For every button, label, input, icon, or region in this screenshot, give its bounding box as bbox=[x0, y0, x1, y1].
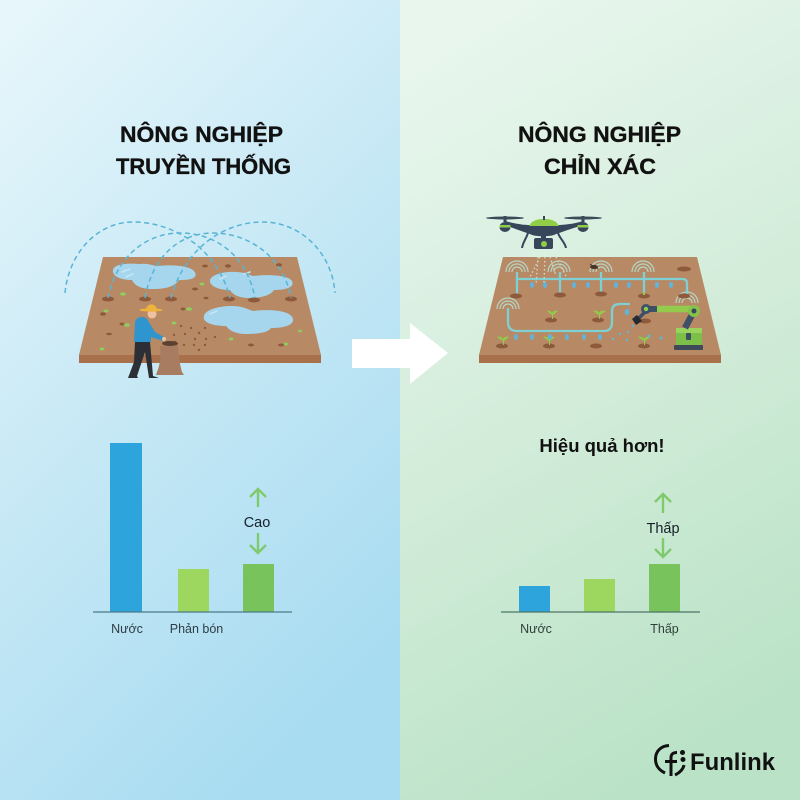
seedlings bbox=[497, 292, 650, 345]
illustration: traditional field bbox=[65, 222, 335, 378]
logo wordmark: Funlink bbox=[690, 749, 776, 776]
arrow: up bbox=[250, 489, 266, 507]
soil mounds bbox=[496, 266, 691, 348]
bar chart: traditional farming bbox=[93, 443, 292, 636]
heading: precision farming: CHỈN XÁC bbox=[544, 154, 656, 179]
bar: yield bbox=[649, 564, 680, 612]
water spray arcs bbox=[65, 222, 335, 298]
logo mark bbox=[656, 746, 684, 776]
field side bbox=[79, 355, 321, 363]
label: water: Nước bbox=[111, 622, 143, 636]
bar: yield bbox=[243, 564, 274, 612]
bar chart: precision farming bbox=[501, 494, 700, 636]
soil mounds and seedlings bbox=[100, 263, 297, 351]
water droplets bbox=[514, 282, 673, 341]
bar: water bbox=[519, 586, 550, 612]
label: low callout: Thấp bbox=[646, 521, 680, 537]
field side bbox=[479, 355, 721, 363]
bar: fertilizer bbox=[178, 569, 209, 612]
callout: more efficient: Hiệu quả hơn! bbox=[539, 435, 665, 456]
field top bbox=[479, 257, 721, 355]
label: fertilizer: Phản bón bbox=[170, 622, 223, 636]
heading: traditional farming bbox=[116, 122, 291, 179]
drone bbox=[486, 216, 602, 249]
farmer bbox=[128, 304, 166, 378]
insect bbox=[590, 264, 598, 269]
arrow: down bbox=[655, 538, 671, 557]
heading: traditional farming: TRUYỀN THỐNG bbox=[116, 153, 291, 179]
panel: precision farming background bbox=[400, 0, 800, 800]
heading: precision farming: NÔNG NGHIỆP bbox=[518, 122, 681, 147]
irrigation pipes bbox=[508, 272, 687, 331]
arrow: down bbox=[250, 533, 266, 553]
robot arm bbox=[632, 304, 703, 350]
puddle highlights bbox=[122, 269, 250, 314]
seed sack bbox=[156, 345, 184, 375]
panel: traditional farming background bbox=[0, 0, 400, 800]
bar: fertilizer bbox=[584, 579, 615, 612]
heading: traditional farming: NÔNG NGHIỆP bbox=[120, 122, 283, 147]
label: water: Nước bbox=[520, 622, 552, 636]
label: low: Thấp bbox=[650, 622, 679, 636]
label: high: Cao bbox=[244, 515, 270, 531]
sensor signal rings bbox=[497, 261, 698, 309]
arrow: up bbox=[655, 494, 671, 513]
arrow between panels bbox=[352, 323, 448, 384]
water puddles bbox=[113, 264, 293, 334]
heading: precision farming bbox=[518, 122, 681, 179]
bar: water bbox=[110, 443, 142, 612]
drone spray dots bbox=[530, 257, 566, 285]
illustration: precision field bbox=[479, 216, 721, 363]
logo: Funlink bbox=[656, 746, 776, 776]
field top bbox=[79, 257, 321, 355]
